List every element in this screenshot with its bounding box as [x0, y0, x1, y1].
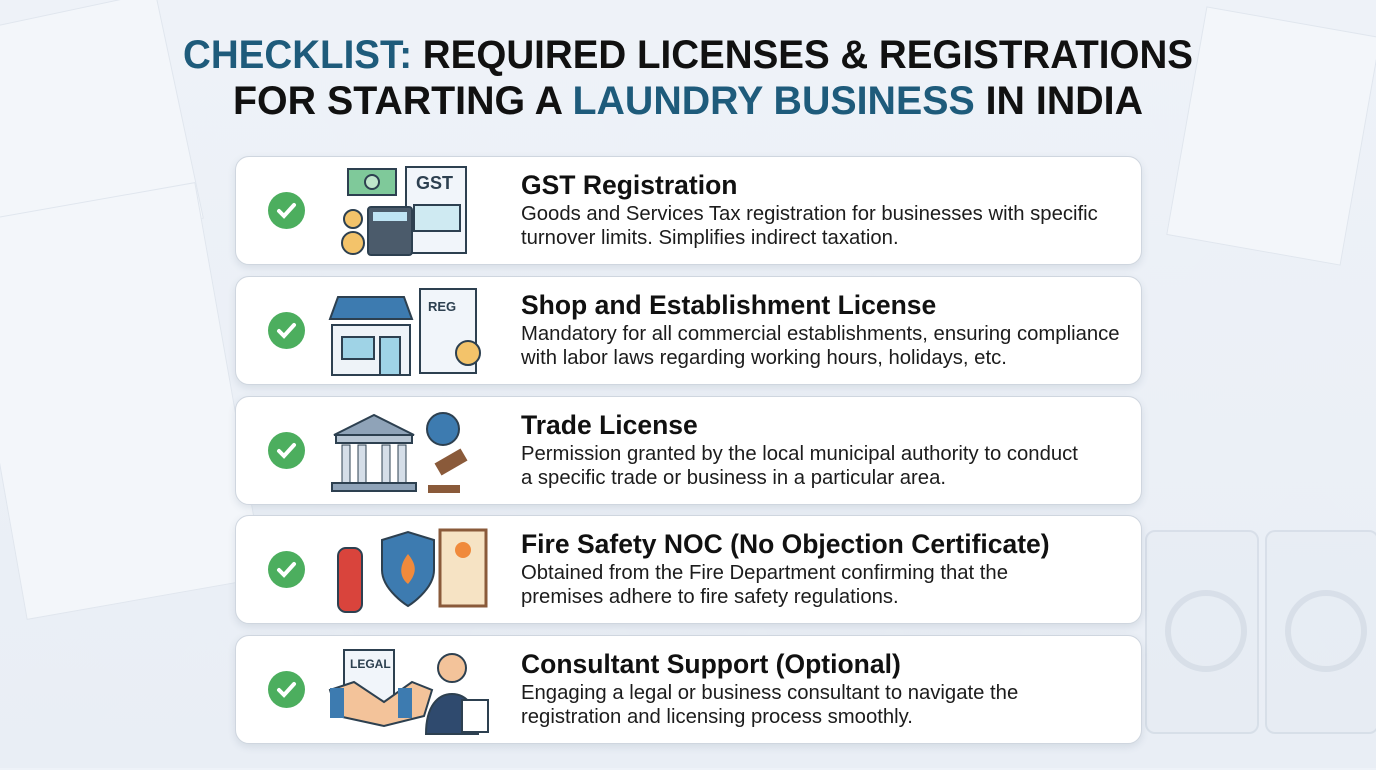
- card: GST: [235, 156, 1142, 265]
- title: FOR STARTING A LAUNDRY BUSINESS IN INDIA: [233, 79, 1143, 123]
- icon: check: [268, 551, 305, 588]
- text: Obtained from the Fire Department confirming that the: [521, 562, 1008, 584]
- text: turnover limits. Simplifies indirect taxation.: [521, 227, 899, 249]
- text: [521, 529, 1050, 608]
- icon: shop: [328, 288, 481, 376]
- icon: building and gavel: [331, 412, 468, 493]
- icon: handshake and consultant: LEGAL: [350, 657, 391, 671]
- icon: check: [268, 432, 305, 469]
- card: fire: [235, 515, 1142, 624]
- text: Consultant Support (Optional): [521, 649, 901, 679]
- icon: shop: REG: [428, 299, 456, 314]
- icon: handshake and consultant: [328, 649, 489, 735]
- icon: fire safety: [337, 528, 488, 613]
- card: consultant: [235, 635, 1142, 744]
- background decoration: documents: [0, 0, 204, 260]
- text: Engaging a legal or business consultant to navigate the: [521, 682, 1018, 704]
- text: Fire Safety NOC (No Objection Certificate): [521, 529, 1050, 559]
- title: CHECKLIST: REQUIRED LICENSES & REGISTRATIONS: [183, 33, 1193, 77]
- icon: gst: GST: [416, 173, 453, 193]
- text: [521, 410, 1078, 489]
- icon: check: [268, 312, 305, 349]
- icon: check: [268, 671, 305, 708]
- card: shop: [235, 276, 1142, 385]
- text: [521, 170, 1098, 249]
- text: with labor laws regarding working hours, holidays, etc.: [521, 347, 1007, 369]
- text: [521, 649, 1018, 728]
- text: GST Registration: [521, 170, 737, 200]
- icon: gst: [341, 166, 467, 256]
- card: trade: [235, 396, 1142, 505]
- text: Trade License: [521, 410, 698, 440]
- text: Goods and Services Tax registration for businesses with specific: [521, 203, 1098, 225]
- text: registration and licensing process smoothly.: [521, 706, 913, 728]
- text: a specific trade or business in a particular area.: [521, 467, 946, 489]
- text: [521, 290, 1120, 369]
- title: [183, 33, 1193, 123]
- text: Shop and Establishment License: [521, 290, 936, 320]
- icon: check: [268, 192, 305, 229]
- text: Mandatory for all commercial establishments, ensuring compliance: [521, 323, 1120, 345]
- text: premises adhere to fire safety regulations.: [521, 586, 899, 608]
- text: Permission granted by the local municipal authority to conduct: [521, 443, 1078, 465]
- background decoration: washing machines: [1145, 530, 1376, 734]
